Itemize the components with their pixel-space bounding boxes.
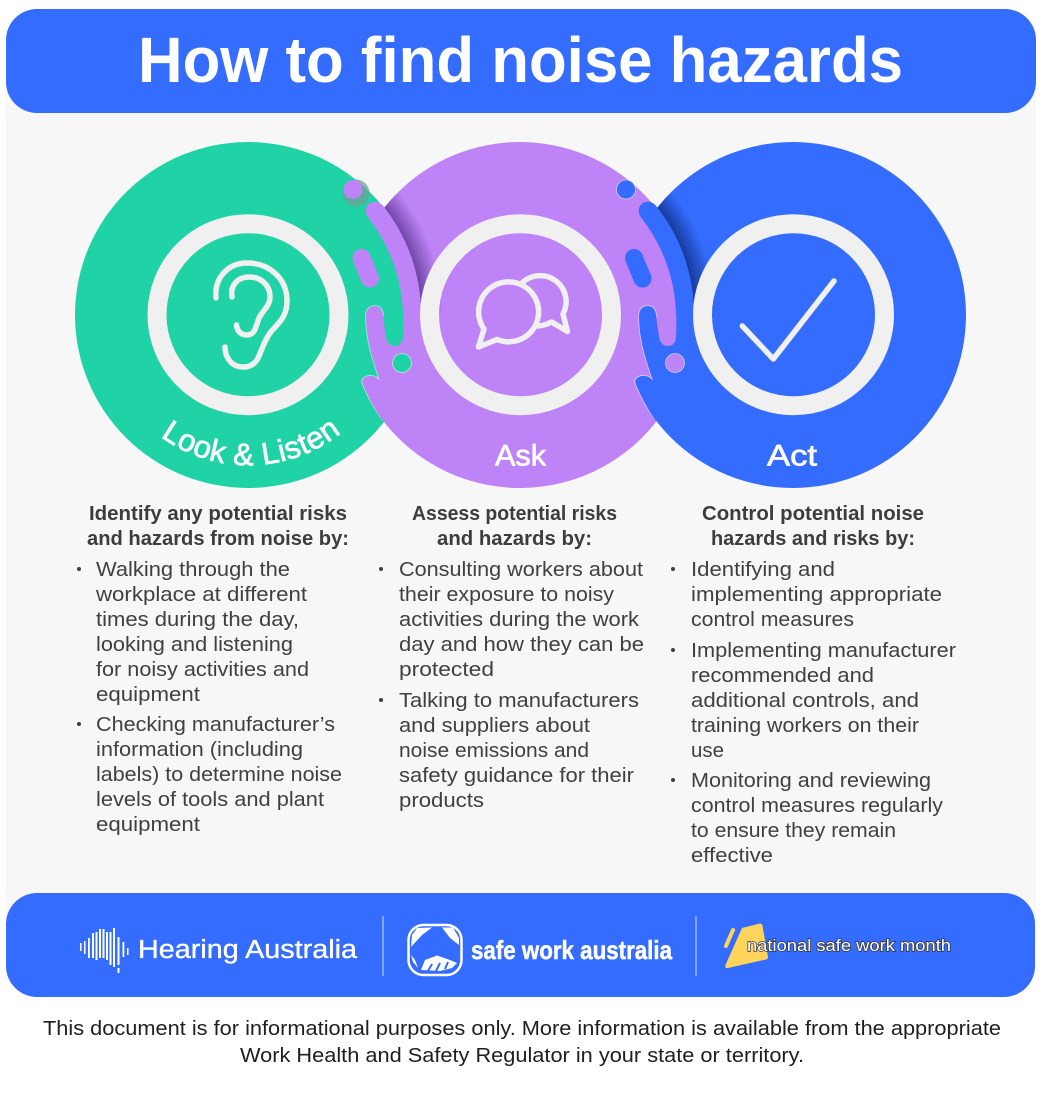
title: How to find noise hazards <box>138 24 903 96</box>
blue splash connector over purple circle <box>616 180 698 421</box>
logo: safe work australia: safe work australia <box>471 935 672 965</box>
list: ask: activities during the work <box>399 608 640 631</box>
list: act: Implementing manufacturer <box>691 639 956 662</box>
circle: act (blue) <box>620 142 966 488</box>
list: ask: noise emissions and <box>399 739 589 762</box>
heading: look and listen: Identify any potential risks <box>89 503 347 525</box>
logo: national safe work month <box>725 924 951 968</box>
list: act: recommended and <box>691 664 874 687</box>
disclaimer note: Work Health and Safety Regulator in your state or territory. <box>240 1045 804 1067</box>
icon: speech bubbles <box>478 276 568 347</box>
heading: act <box>702 503 924 550</box>
list: act: control measures regularly <box>691 794 944 817</box>
footer banner with logos <box>6 893 1035 997</box>
list: look and listen: equipment <box>96 683 200 706</box>
list: look and listen: looking and listening <box>96 633 293 656</box>
divider <box>695 916 697 976</box>
heading: ask <box>412 503 617 550</box>
heading: act: Control potential noise <box>702 503 924 525</box>
list: act: effective <box>691 844 773 867</box>
list: ask: products <box>399 789 484 812</box>
list: ask: and suppliers about <box>399 714 590 737</box>
list: ask: Consulting workers about <box>399 558 643 581</box>
green dot <box>392 354 412 372</box>
column: look and listen <box>77 503 349 836</box>
blue pill <box>634 258 642 278</box>
disclaimer note <box>43 1018 1001 1067</box>
logo: safe work australia <box>408 925 672 975</box>
icon: sound wave <box>80 928 128 973</box>
list: act: Monitoring and reviewing <box>691 769 931 792</box>
shadow on purple circle <box>384 194 440 312</box>
column: ask <box>379 503 644 812</box>
logo: national safe work month: national safe work month <box>747 936 951 955</box>
purple pill <box>362 258 370 278</box>
list: look and listen: information (including <box>96 738 303 761</box>
list: look and listen: for noisy activities and <box>96 658 309 681</box>
logo: hearing australia <box>80 928 358 973</box>
circle: ask (purple) <box>347 142 693 488</box>
circle: look and listen (green) <box>75 142 421 488</box>
heading: look and listen <box>87 503 349 550</box>
list: look and listen: Walking through the <box>96 558 290 581</box>
column: act <box>671 503 956 867</box>
list: act: additional controls, and <box>691 689 919 712</box>
heading: look and listen: and hazards from noise by: <box>87 528 349 550</box>
ring and chat icon <box>430 224 612 406</box>
list: act: control measures <box>691 608 854 631</box>
purple dot with shadow <box>342 180 370 206</box>
icon: australia and tortoise badge <box>408 925 462 975</box>
list: ask <box>379 558 644 812</box>
purple dot on blue <box>666 354 684 372</box>
list: ask: safety guidance for their <box>399 764 634 787</box>
list: act: implementing appropriate <box>691 583 942 606</box>
list: ask: their exposure to noisy <box>399 583 615 606</box>
logo: hearing australia: Hearing Australia <box>138 936 358 964</box>
heading: ask: Assess potential risks <box>412 503 617 525</box>
icon: ear <box>216 263 287 367</box>
blue dot <box>616 180 636 199</box>
list: act: Identifying and <box>691 558 835 581</box>
list: ask: protected <box>399 658 494 681</box>
heading: act: hazards and risks by: <box>711 528 915 550</box>
list: act <box>671 558 956 867</box>
list: look and listen: labels) to determine noise <box>96 763 342 786</box>
list: look and listen <box>77 558 342 836</box>
ring and ear icon <box>157 224 339 406</box>
label: ask: Ask <box>495 440 547 472</box>
list: look and listen: Checking manufacturer’s <box>96 713 335 736</box>
list: act: training workers on their <box>691 714 919 737</box>
list: act: to ensure they remain <box>691 819 896 842</box>
ring and check icon <box>702 224 884 406</box>
shadow on blue circle <box>658 193 714 312</box>
label: act: Act <box>767 440 818 472</box>
list: ask: Talking to manufacturers <box>399 689 639 712</box>
header banner <box>6 9 1036 113</box>
icon: check mark <box>742 281 834 359</box>
label: look and listen: Look & Listen <box>162 420 340 466</box>
heading: ask: and hazards by: <box>437 528 592 550</box>
list: act: use <box>691 739 724 762</box>
divider <box>382 916 384 976</box>
purple splash connector over green circle <box>342 180 425 421</box>
list: look and listen: times during the day, <box>96 608 299 631</box>
list: look and listen: levels of tools and plant <box>96 788 324 811</box>
list: ask: day and how they can be <box>399 633 644 656</box>
disclaimer note: This document is for informational purposes only. More information is available from the appropriate <box>43 1018 1001 1040</box>
list: look and listen: workplace at different <box>95 583 307 606</box>
list: look and listen: equipment <box>96 813 200 836</box>
